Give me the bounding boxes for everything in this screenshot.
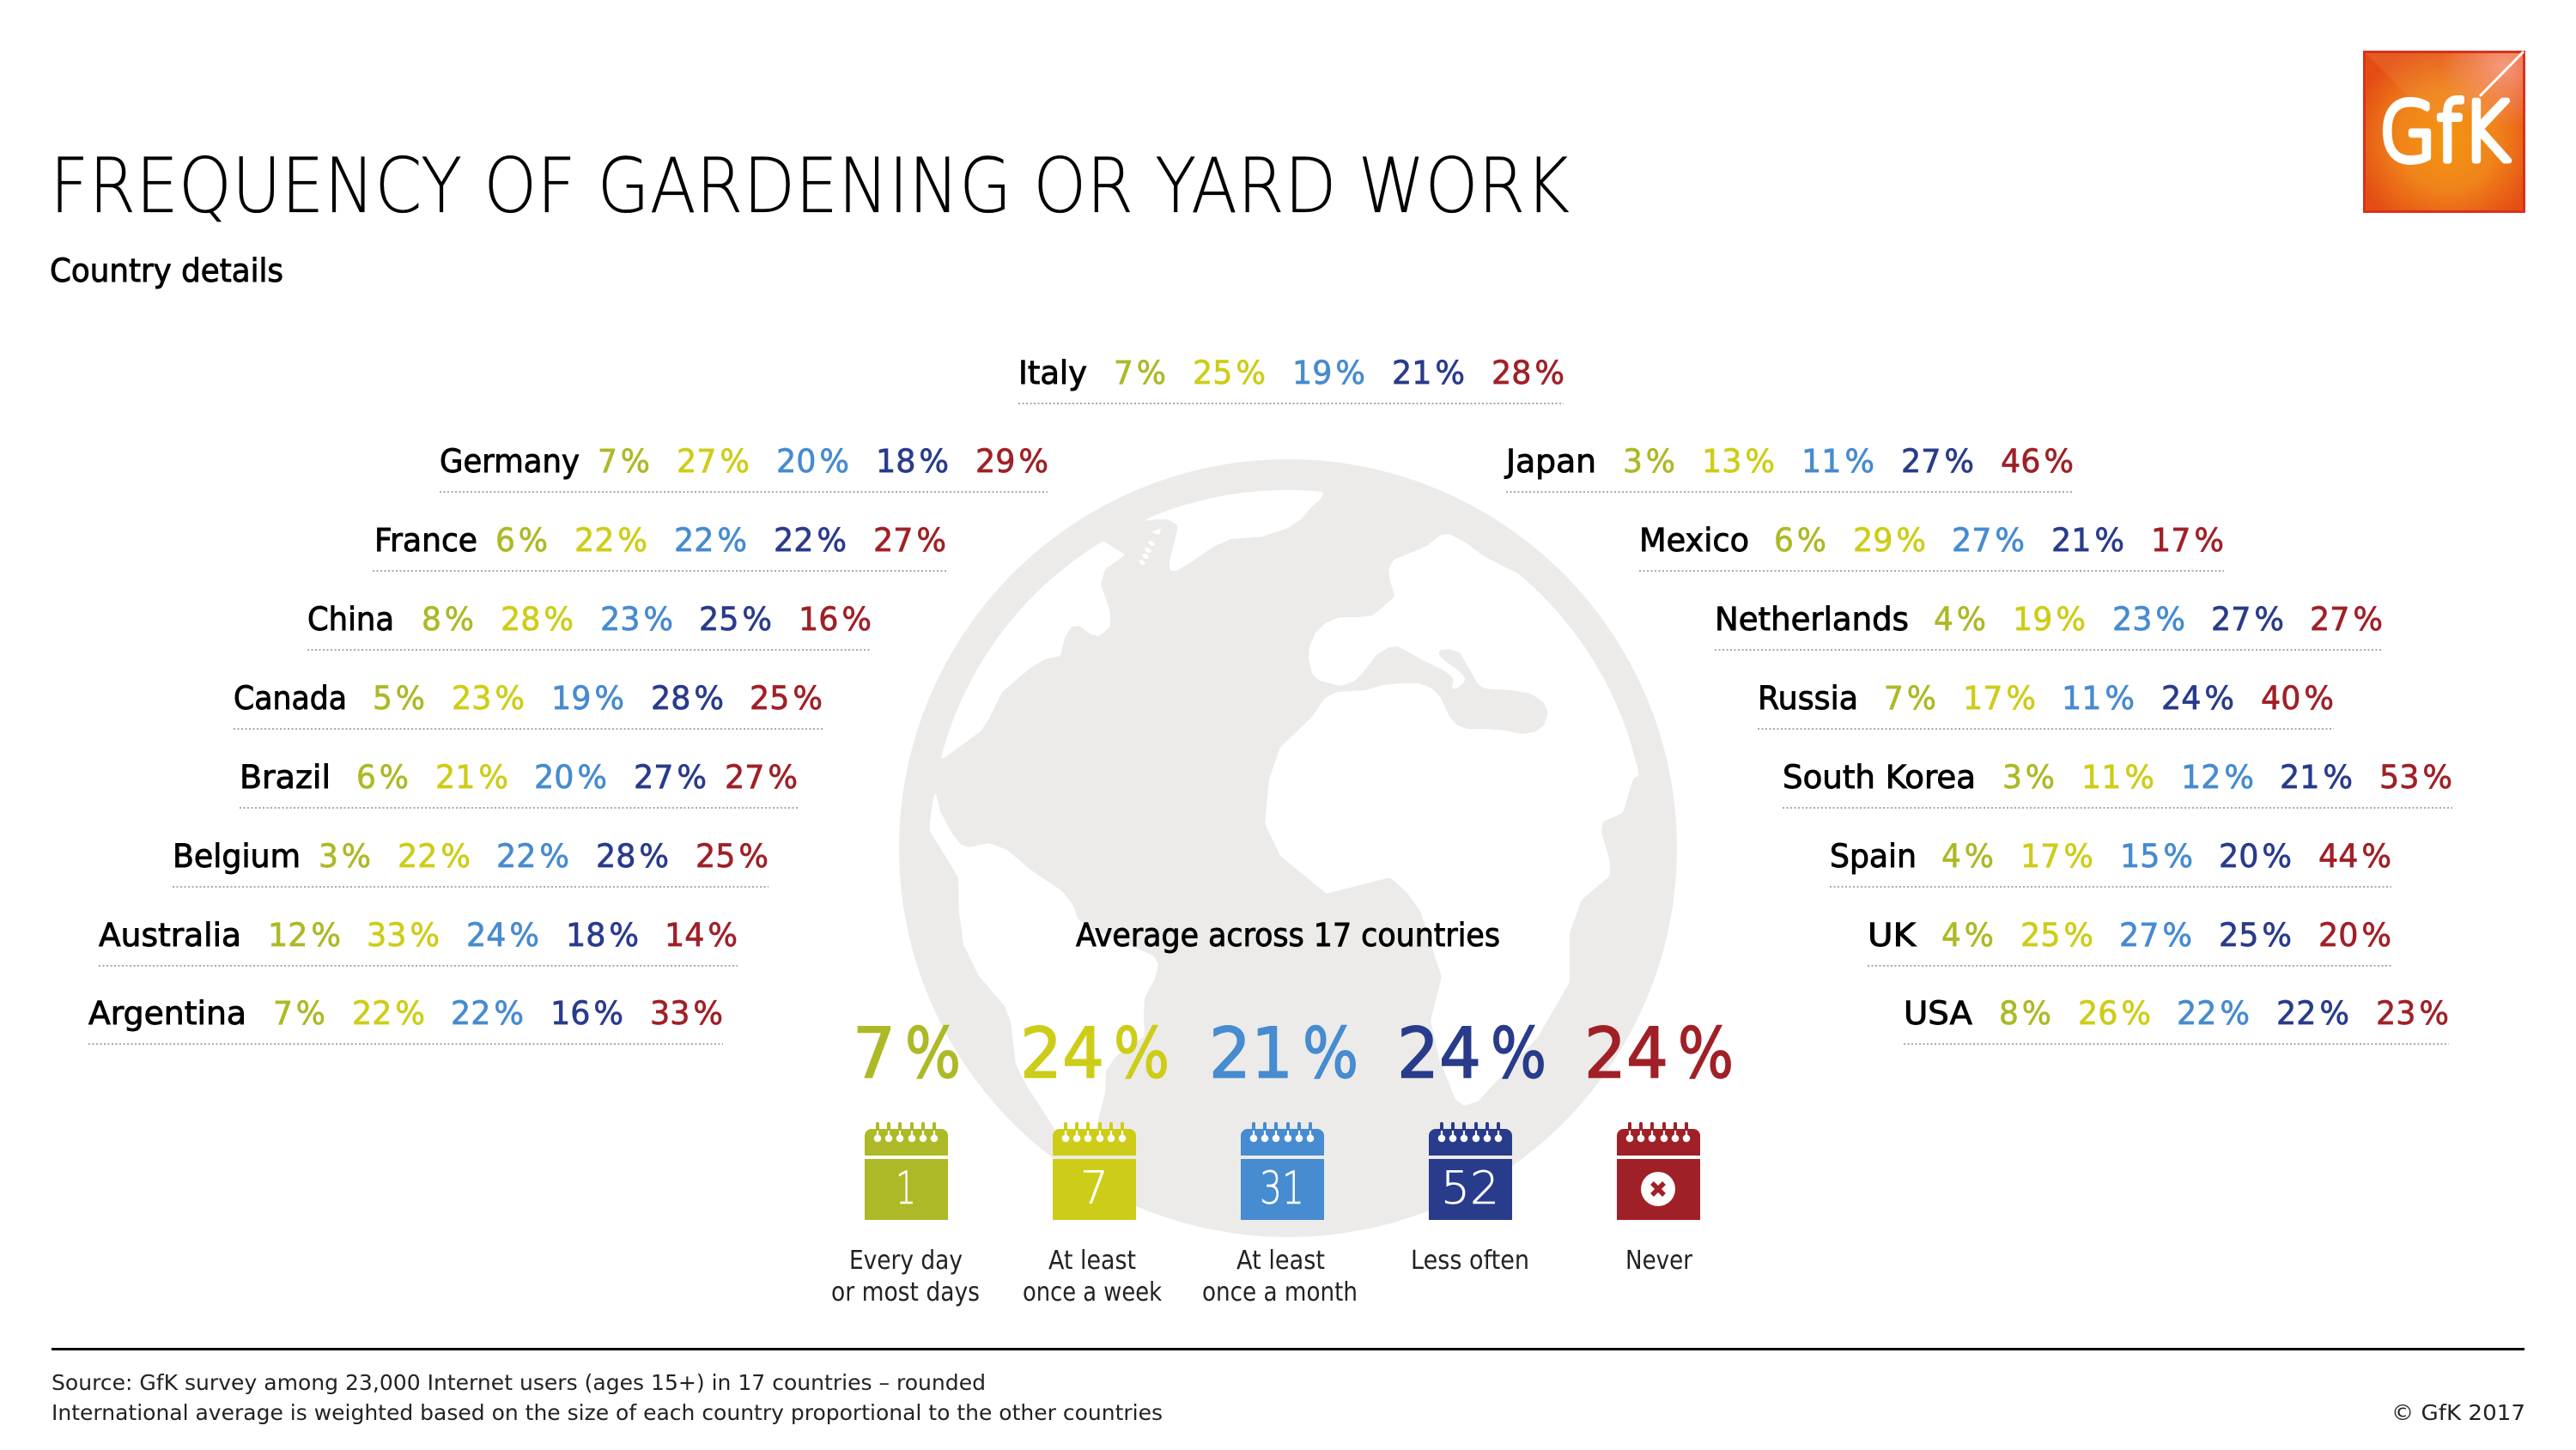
row: USA: USA — [1904, 995, 1972, 1032]
row: Italy: 7% — [1114, 355, 1166, 391]
average: never: 24 — [1584, 1014, 1668, 1095]
row: Australia: 33% — [367, 917, 440, 954]
row: Russia: 24% — [2161, 680, 2234, 717]
row: Russia: Russia — [1758, 680, 1858, 717]
row: France: 22% — [674, 522, 747, 559]
row: UK: UK — [1868, 917, 1917, 954]
row: France: 22% — [774, 522, 847, 559]
row: Canada: 23% — [452, 680, 525, 717]
row: Belgium: 25% — [696, 838, 769, 875]
average: never: % — [1678, 1014, 1734, 1095]
row: Canada: 19% — [551, 680, 624, 717]
row: Spain — [1830, 838, 2391, 887]
row: Brazil: Brazil — [240, 759, 331, 796]
average: every day or most days: 7 — [853, 1014, 896, 1095]
row: Japan: Japan — [1504, 443, 1596, 480]
row: Belgium: 22% — [496, 838, 569, 875]
row: Netherlands: 27% — [2310, 601, 2383, 638]
row: China: 8% — [422, 601, 474, 638]
row: China: 28% — [501, 601, 574, 638]
row: Russia — [1758, 680, 2334, 729]
row: France — [373, 522, 946, 571]
average: at least once a week: % — [1114, 1014, 1170, 1095]
average: every day or most days: % — [905, 1014, 961, 1095]
average: less often: 52 — [1441, 1162, 1499, 1215]
row: Spain: 15% — [2120, 838, 2193, 875]
row: Netherlands: Netherlands — [1715, 601, 1909, 638]
row: Mexico — [1639, 522, 2224, 571]
row: Brazil: 21% — [435, 759, 508, 796]
row: Argentina: Argentina — [88, 995, 246, 1032]
row: Mexico: 17% — [2151, 522, 2224, 559]
row: Mexico: 29% — [1853, 522, 1926, 559]
average: every day or most days: or most days — [831, 1277, 980, 1307]
average: at least once a week: At least — [1048, 1246, 1136, 1276]
row: Brazil: 27% — [725, 759, 798, 796]
row: Brazil: 20% — [534, 759, 607, 796]
average: less often: 24 — [1397, 1014, 1481, 1095]
row: Mexico: 27% — [1952, 522, 2025, 559]
row: Italy: 19% — [1292, 355, 1365, 391]
row: Argentina: 22% — [352, 995, 425, 1032]
average: less often — [1397, 1014, 1546, 1276]
row: Argentina: 7% — [273, 995, 325, 1032]
row: Spain: 17% — [2020, 838, 2093, 875]
average: every day or most days — [831, 1014, 980, 1307]
row: Russia: 7% — [1884, 680, 1936, 717]
average: at least once a week — [1020, 1014, 1170, 1307]
row: Japan — [1504, 443, 2074, 492]
row: South Korea: 53% — [2379, 759, 2452, 796]
row: USA: 23% — [2376, 995, 2449, 1032]
row: South Korea — [1783, 759, 2452, 808]
row: Russia: 17% — [1963, 680, 2036, 717]
row: Mexico: 21% — [2051, 522, 2124, 559]
row: Japan: 11% — [1801, 443, 1874, 480]
row: UK: 4% — [1941, 917, 1994, 954]
row: Belgium: Belgium — [173, 838, 301, 875]
average: never: Never — [1625, 1246, 1693, 1276]
row: China: 23% — [600, 601, 673, 638]
row: Argentina: 22% — [451, 995, 524, 1032]
row: Australia: 24% — [466, 917, 539, 954]
row: Belgium: 3% — [319, 838, 371, 875]
row: Mexico: 6% — [1774, 522, 1826, 559]
row: South Korea: 3% — [2002, 759, 2055, 796]
row: Canada: 5% — [373, 680, 425, 717]
row: Italy: 28% — [1492, 355, 1564, 391]
average: at least once a week: 24 — [1020, 1014, 1104, 1095]
globe background — [899, 459, 1677, 1237]
row: Germany: 18% — [876, 443, 949, 480]
row: Brazil: 6% — [356, 759, 409, 796]
row: Germany: Germany — [440, 443, 580, 480]
average: less often: % — [1491, 1014, 1546, 1095]
subtitle: Country details — [50, 252, 283, 289]
average: every day or most days: 1 — [896, 1162, 916, 1215]
row: Australia: 12% — [268, 917, 341, 954]
row: Belgium — [173, 838, 769, 887]
row: France: 27% — [873, 522, 946, 559]
row: Australia: 14% — [665, 917, 738, 954]
row: Germany: 20% — [776, 443, 849, 480]
row: South Korea: 12% — [2181, 759, 2254, 796]
row: Canada: 28% — [651, 680, 724, 717]
row: France: 22% — [574, 522, 647, 559]
row: Australia: 18% — [566, 917, 639, 954]
row: Argentina — [88, 995, 723, 1044]
row: Brazil — [240, 759, 798, 808]
source note — [52, 1370, 1163, 1425]
row: South Korea: South Korea — [1783, 759, 1976, 796]
row: UK: 27% — [2119, 917, 2192, 954]
row: Canada — [234, 680, 823, 729]
row: China — [307, 601, 872, 650]
row: South Korea: 11% — [2081, 759, 2154, 796]
row: Spain: 20% — [2219, 838, 2292, 875]
row: Spain: 44% — [2318, 838, 2391, 875]
row: China: China — [307, 601, 394, 638]
row: Australia: Australia — [99, 917, 241, 954]
footer rule — [52, 1348, 2524, 1350]
average: less often: Less often — [1411, 1246, 1529, 1276]
row: USA — [1904, 995, 2449, 1044]
average: at least once a week: 7 — [1080, 1162, 1109, 1215]
row: Netherlands: 27% — [2211, 601, 2284, 638]
row: UK: 25% — [2219, 917, 2292, 954]
row: Italy: 21% — [1392, 355, 1465, 391]
source note: International average is weighted based on the size of each country proportional to the other countries — [52, 1400, 1163, 1425]
copyright: © GfK 2017 — [2391, 1400, 2525, 1425]
row: Belgium: 22% — [398, 838, 471, 875]
row: Japan: 13% — [1702, 443, 1775, 480]
average: at least once a week: once a week — [1023, 1277, 1163, 1307]
row: Germany: 27% — [677, 443, 750, 480]
logo: GfK: GfK — [2379, 86, 2510, 180]
row: Netherlands: 4% — [1934, 601, 1986, 638]
row: Canada: 25% — [750, 680, 823, 717]
source note: Source: GfK survey among 23,000 Internet users (ages 15+) in 17 countries – rounded — [52, 1370, 986, 1395]
row: Italy: Italy — [1018, 355, 1087, 391]
row: Germany — [440, 443, 1048, 492]
row: Netherlands: 23% — [2112, 601, 2185, 638]
row: China: 16% — [799, 601, 872, 638]
average: at least once a month: At least — [1236, 1246, 1325, 1276]
average: at least once a month: 31 — [1260, 1162, 1304, 1215]
row: Japan: 27% — [1901, 443, 1974, 480]
row: USA: 8% — [1999, 995, 2051, 1032]
row: Japan: 46% — [2001, 443, 2074, 480]
row: Brazil: 27% — [634, 759, 707, 796]
row: USA: 22% — [2177, 995, 2250, 1032]
row: Spain: Spain — [1830, 838, 1917, 875]
row: France: 6% — [495, 522, 548, 559]
average: never — [1584, 1014, 1734, 1276]
row: South Korea: 21% — [2280, 759, 2353, 796]
average: at least once a month: once a month — [1202, 1277, 1358, 1307]
row: Spain: 4% — [1941, 838, 1994, 875]
row: UK — [1868, 917, 2391, 966]
logo: GfK — [2363, 51, 2525, 213]
row: Japan: 3% — [1623, 443, 1675, 480]
row: USA: 26% — [2078, 995, 2151, 1032]
row: UK: 20% — [2318, 917, 2391, 954]
row: Mexico: Mexico — [1639, 522, 1749, 559]
row: Netherlands: 19% — [2013, 601, 2086, 638]
row: Australia — [99, 917, 738, 966]
row: Canada: Canada — [234, 680, 347, 717]
row: UK: 25% — [2020, 917, 2093, 954]
row: Argentina: 16% — [550, 995, 623, 1032]
row: USA: 22% — [2276, 995, 2349, 1032]
heading: average across 17 countries: Average across 17 countries — [1076, 917, 1500, 954]
row: Netherlands — [1715, 601, 2383, 650]
row: Germany: 29% — [975, 443, 1048, 480]
row: Belgium: 28% — [596, 838, 669, 875]
row: France: France — [374, 522, 477, 559]
row: Germany: 7% — [598, 443, 650, 480]
average: at least once a month — [1202, 1014, 1358, 1307]
row: Italy: 25% — [1193, 355, 1266, 391]
title: FREQUENCY OF GARDENING OR YARD WORK — [50, 142, 1570, 230]
row: Russia: 40% — [2261, 680, 2334, 717]
average: every day or most days: Every day — [849, 1246, 963, 1276]
row: Italy — [1018, 355, 1564, 403]
average: at least once a month: % — [1303, 1014, 1358, 1095]
row: Russia: 11% — [2062, 680, 2135, 717]
average: at least once a month: 21 — [1209, 1014, 1293, 1095]
row: China: 25% — [699, 601, 772, 638]
row: Argentina: 33% — [650, 995, 723, 1032]
